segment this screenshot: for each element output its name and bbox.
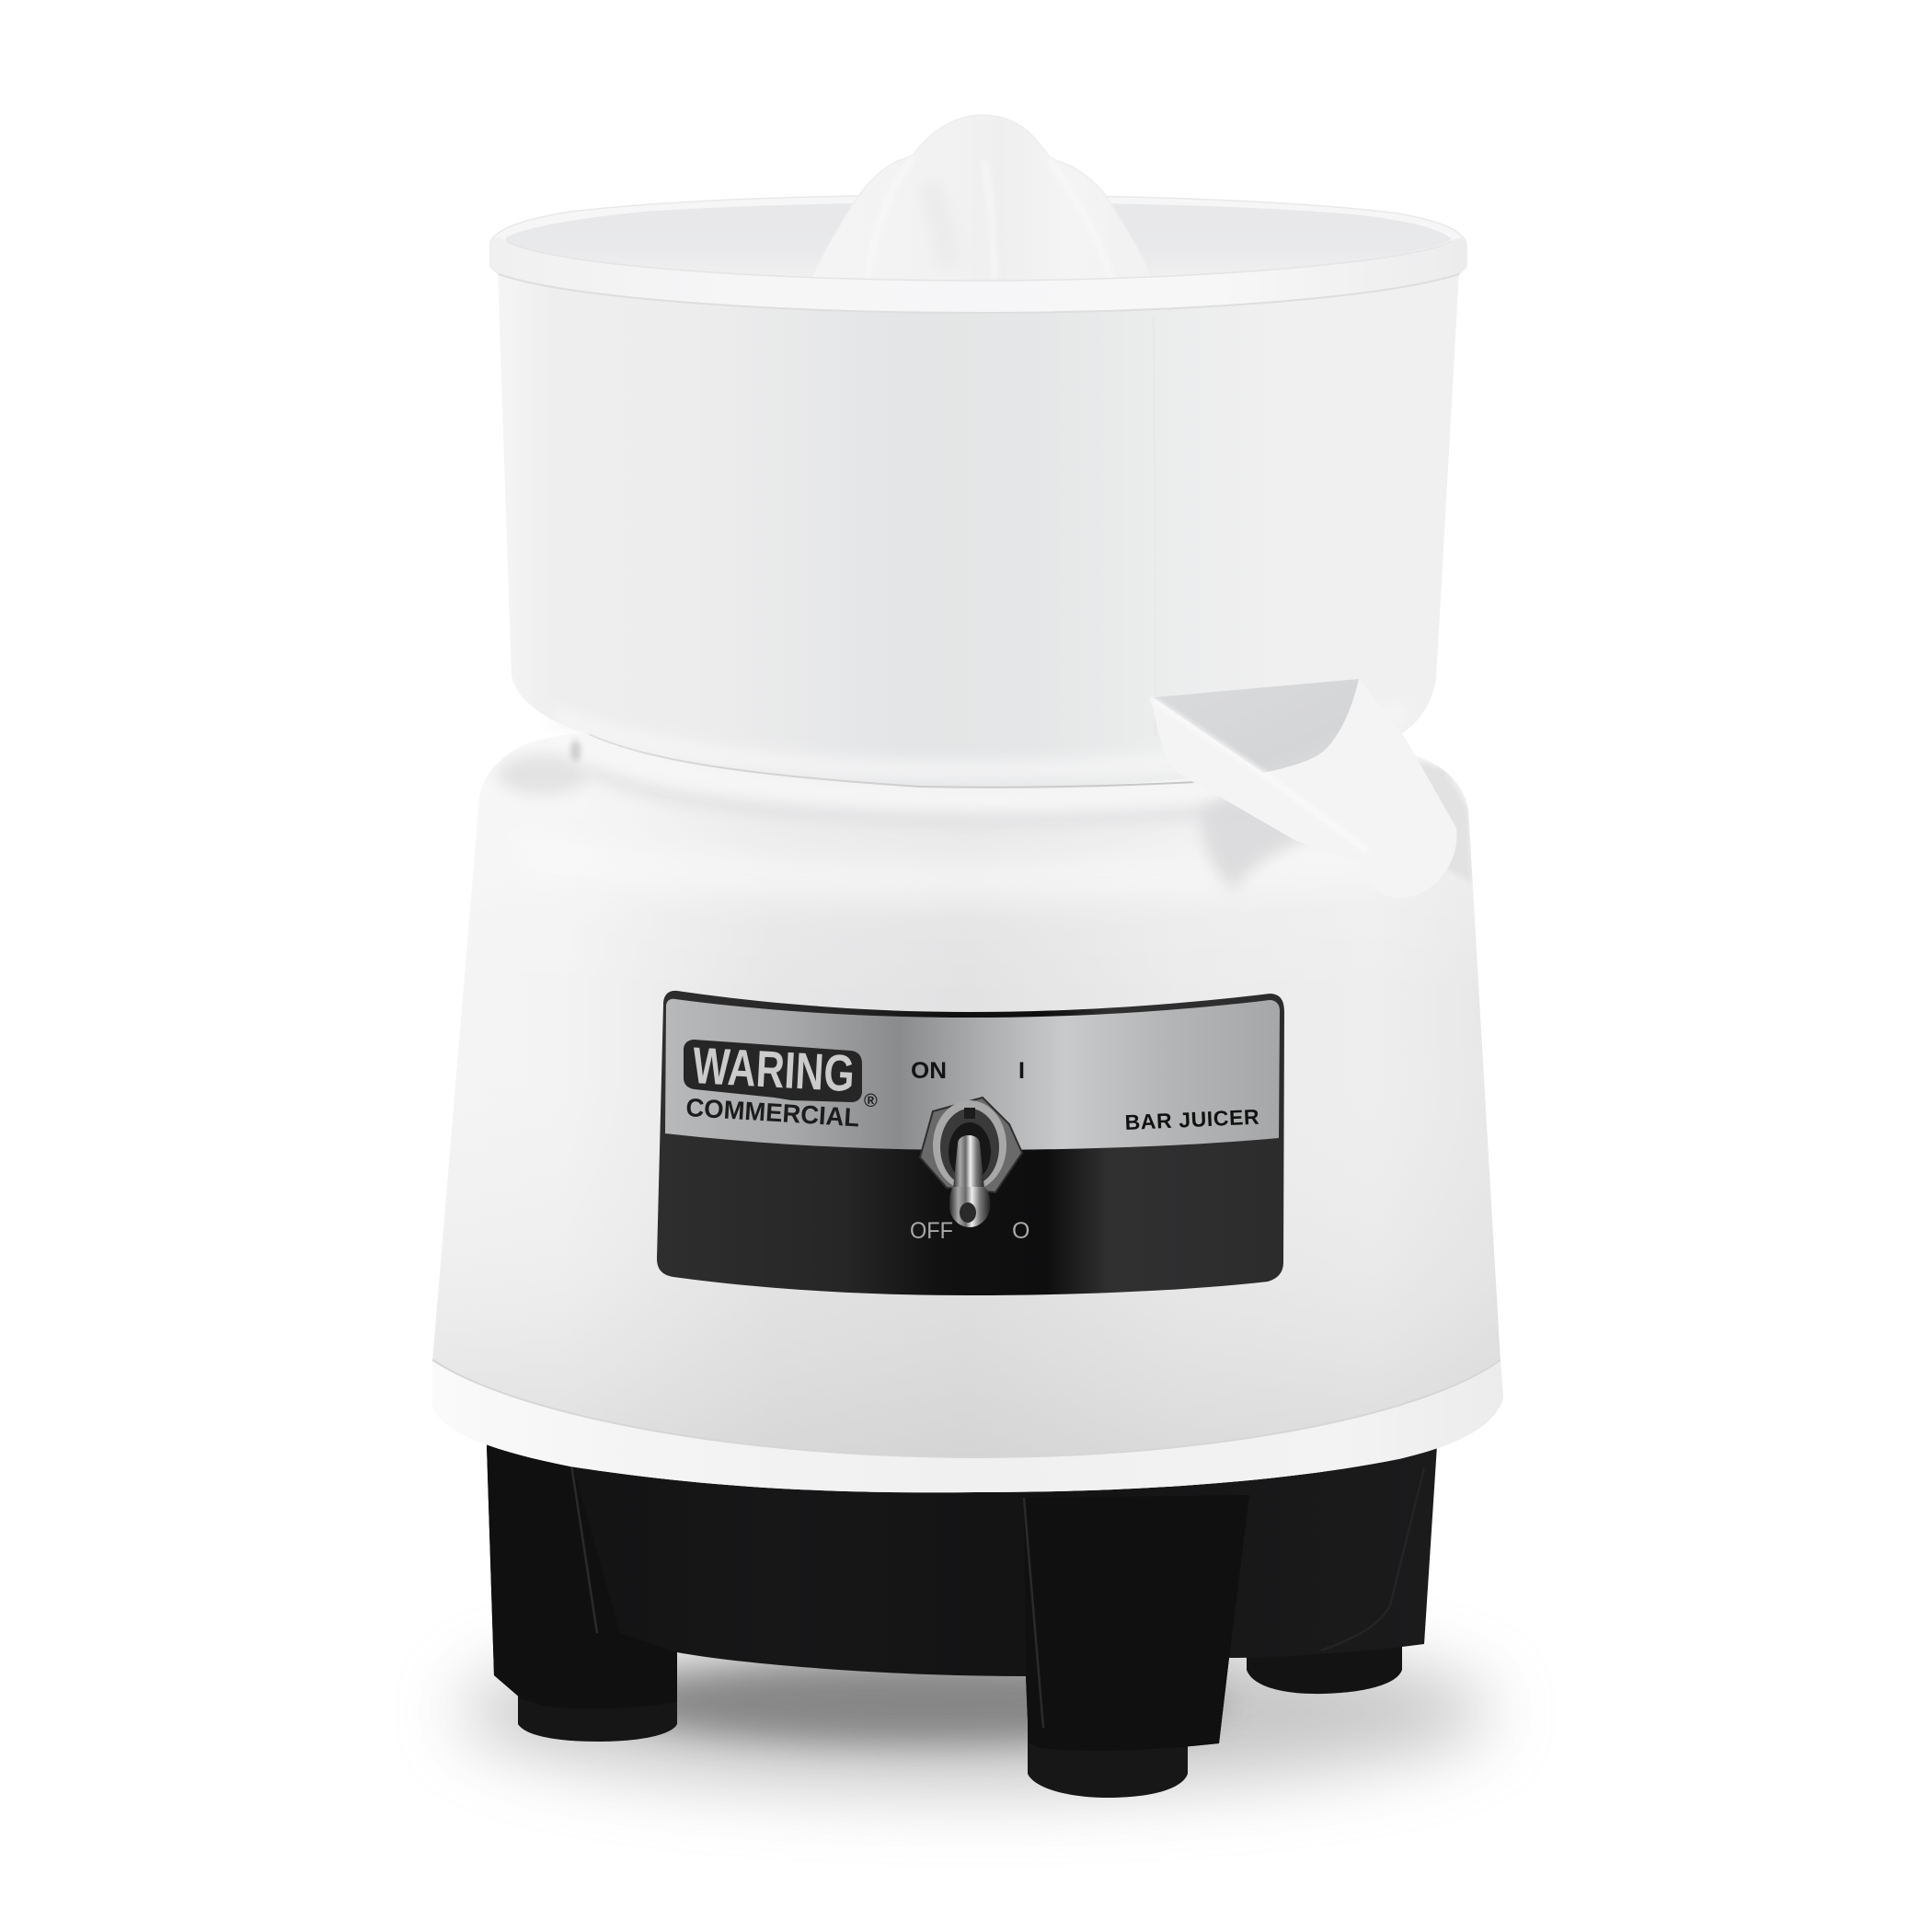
foot: front centre [1028, 1711, 1188, 1798]
toggle switch [920, 1098, 1022, 1227]
seam line [1154, 316, 1156, 736]
base shoulder shading [497, 740, 1472, 883]
logo: Waring Commercial [684, 1036, 878, 1133]
rim back [490, 195, 1466, 313]
base lip [432, 1360, 1503, 1492]
foot: front left [518, 1619, 677, 1742]
spout scoop [1153, 679, 1359, 773]
bowl bottom band [552, 708, 1408, 771]
citrus reamer [810, 115, 1156, 282]
switch label: O: O [1012, 1218, 1029, 1244]
black base with feet [486, 1417, 1439, 1798]
bowl contact line [589, 734, 1196, 788]
logo: Waring Commercial: COMMERCIAL [685, 1093, 860, 1133]
pouring spout [1150, 679, 1456, 898]
logo: Waring Commercial: ® [864, 1091, 878, 1111]
leg edge lines [570, 1458, 1424, 1728]
control plate [657, 991, 1284, 1295]
spout ridge [1152, 699, 1368, 851]
bowl rim front [490, 237, 1466, 313]
juice bowl [490, 115, 1466, 788]
switch label: ON: ON [911, 1058, 947, 1084]
floor shadow [460, 1633, 1490, 1789]
foot: rear right [1247, 1619, 1402, 1694]
switch label: OFF: OFF [910, 1218, 953, 1244]
brushed steel band [665, 999, 1280, 1150]
base body [486, 1417, 1439, 1751]
logo: Waring Commercial: WARING [691, 1036, 856, 1102]
bowl interior [506, 202, 1452, 281]
product label: Bar Juicer: BAR JUICER [1124, 1105, 1259, 1134]
switch label: I: I [1018, 1058, 1025, 1084]
spout cast shadow [1201, 791, 1316, 891]
base housing [432, 733, 1503, 1492]
legs darker faces [486, 1417, 677, 1708]
